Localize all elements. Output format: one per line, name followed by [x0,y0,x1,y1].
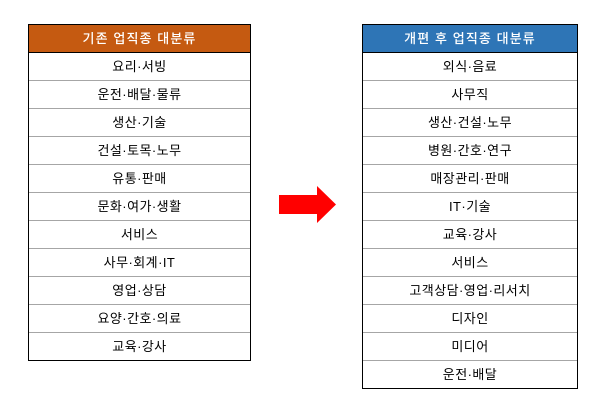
arrow: red right arrow [279,186,336,223]
row: dining and beverage: 외식·음료 [443,59,497,74]
row: driving and delivery: 운전·배달 [443,367,497,382]
row: retail and sales: 유통·판매 [112,171,167,186]
row: office and accounting [29,249,250,277]
row: hospital, nursing, research [363,137,577,165]
row: office work [363,81,577,109]
row: customer counseling, sales, research: 고객상담·영업·리서치 [409,283,531,298]
heading: existing categories [29,25,250,53]
row: sales and counseling: 영업·상담 [112,283,167,298]
row: retail and sales [29,165,250,193]
row: office and accounting: 사무·회계·IT [104,255,175,270]
row: education [363,221,577,249]
row: service [363,249,577,277]
row: food service [29,53,250,81]
row: sales and counseling [29,277,250,305]
row: production, construction, labor [363,109,577,137]
row: driving and logistics [29,81,250,109]
row: production and technical: 생산·기술 [112,115,167,130]
row: culture and leisure [29,193,250,221]
row: design: 디자인 [451,311,489,326]
row: dining and beverage [363,53,577,81]
row: construction and labor [29,137,250,165]
row: IT and technical [363,193,577,221]
row: education: 교육·강사 [112,339,167,354]
row: store management and sales [363,165,577,193]
row: media [363,333,577,361]
row: service: 서비스 [451,255,489,270]
heading: revised categories: 개편 후 업직종 대분류 [404,31,536,46]
row: service [29,221,250,249]
row: care and medical [29,305,250,333]
panel: existing job categories table [28,24,251,361]
panel: revised job categories table [362,24,578,389]
row: construction and labor: 건설·토목·노무 [97,143,182,158]
heading: existing categories: 기존 업직종 대분류 [83,31,196,46]
row: production, construction, labor: 생산·건설·노무 [428,115,512,130]
row: production and technical [29,109,250,137]
row: food service: 요리·서빙 [112,59,167,74]
row: store management and sales: 매장관리·판매 [430,171,510,186]
row: service: 서비스 [121,227,158,242]
row: care and medical: 요양·간호·의료 [97,311,182,326]
row: hospital, nursing, research: 병원·간호·연구 [428,143,512,158]
row: office work: 사무직 [451,87,489,102]
row: education: 교육·강사 [443,227,497,242]
row: customer counseling, sales, research [363,277,577,305]
row: design [363,305,577,333]
row: driving and logistics: 운전·배달·물류 [97,87,182,102]
heading: revised categories [363,25,577,53]
row: media: 미디어 [451,339,489,354]
row: culture and leisure: 문화·여가·생활 [97,199,182,214]
row: IT and technical: IT·기술 [449,199,491,214]
